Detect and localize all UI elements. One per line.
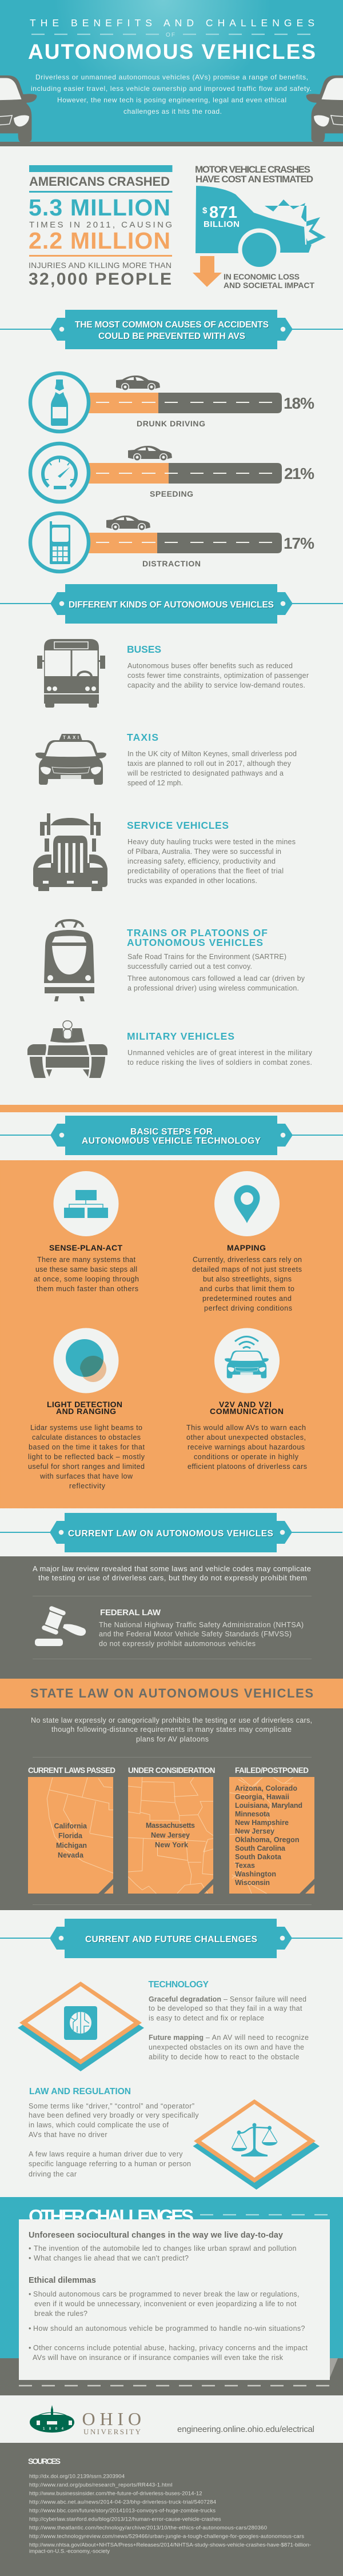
main title: AUTONOMOUS VEHICLES bbox=[28, 40, 316, 63]
times in 2011: TIMES IN 2011, CAUSING bbox=[29, 220, 172, 230]
step: v2v: This would allow AVs to warn each bbox=[186, 1424, 306, 1432]
card: challenge list: • bbox=[29, 2254, 31, 2262]
state law heading bbox=[0, 1679, 343, 1708]
item: technology challenge: TECHNOLOGY bbox=[149, 1980, 209, 1990]
column: failed or postponed: Texas bbox=[235, 1862, 255, 1870]
state law text: though following-distance requirements in many states may complicate bbox=[51, 1726, 292, 1734]
federal law: FEDERAL LAW bbox=[100, 1608, 161, 1618]
item: service vehicles bbox=[33, 813, 296, 891]
step: lidar: with surfaces that have low bbox=[39, 1472, 133, 1480]
step: sense-plan-act: SENSE-PLAN-ACT bbox=[49, 1243, 122, 1252]
cost figure bbox=[202, 203, 240, 229]
column: current laws passed: California bbox=[54, 1822, 87, 1830]
step: mapping: detailed maps of not just streets bbox=[192, 1265, 302, 1273]
item: trains or platoons: TRAINS OR PLATOONS OF bbox=[127, 927, 268, 938]
intro paragraph bbox=[31, 73, 312, 115]
cost figure: $ bbox=[202, 206, 208, 215]
banner: basic steps: BASIC STEPS FOR bbox=[130, 1127, 213, 1137]
intro paragraph: Driverless or unmanned autonomous vehicles (AVs) promise a range of benefits, bbox=[35, 73, 308, 81]
item: law and regulation: driving the car bbox=[29, 2170, 77, 2178]
icon: scales diamond bbox=[193, 2099, 320, 2190]
item: service vehicles: Heavy duty hauling trucks were tested in the mines bbox=[127, 838, 296, 846]
card: challenge list: even if it would be unnecessary, inconvenient or even jeopardizing a life to not bbox=[34, 2300, 297, 2308]
column: failed or postponed: South Carolina bbox=[235, 1844, 286, 1852]
item: taxis: TAXIS bbox=[127, 732, 158, 743]
icon: bottle bbox=[30, 373, 89, 432]
column: failed or postponed: FAILED/POSTPONED bbox=[235, 1766, 309, 1775]
item: law and regulation: have been defined very broadly or very specifically bbox=[29, 2111, 199, 2119]
arrow: downward bbox=[193, 256, 222, 287]
icon: train bbox=[44, 920, 94, 1001]
column: current laws passed bbox=[28, 1766, 115, 1894]
step: mapping: perfect driving conditions bbox=[204, 1304, 292, 1312]
item: technology challenge: to be developed so that they fail in a way that bbox=[149, 2004, 302, 2012]
banner: common causes: THE MOST COMMON CAUSES OF ACCIDENTS bbox=[75, 320, 269, 330]
step: lidar: light to be reflected back – mostly bbox=[28, 1453, 145, 1461]
card: challenge list: Unforeseen sociocultural changes in the way we live day-to-day bbox=[29, 2231, 283, 2240]
stat: 32,000 people: 32,000 PEOPLE bbox=[29, 270, 172, 289]
icon: Ohio University seal bbox=[30, 2405, 74, 2433]
item: trains or platoons: successfully carried out a test convoy. bbox=[127, 962, 252, 971]
americans crashed: AMERICANS CRASHED bbox=[29, 174, 170, 189]
panel: federal and state law bbox=[0, 1556, 343, 1910]
step: v2v: efficient platoons of driverless cars bbox=[188, 1463, 307, 1471]
icon: gavel bbox=[35, 1605, 86, 1646]
column: failed or postponed: Minnesota bbox=[235, 1810, 270, 1818]
item: technology challenge: is easy to detect and fix or replace bbox=[149, 2014, 264, 2022]
item: service vehicles: predictability of operations that the fleet of trial bbox=[127, 867, 284, 875]
card: challenge list: • bbox=[29, 2325, 31, 2333]
step: mapping: Currently, driverless cars rely on bbox=[193, 1256, 302, 1264]
column: failed or postponed: Arizona, Colorado bbox=[235, 1784, 297, 1792]
logo wordmark: UNIVERSITY bbox=[83, 2427, 141, 2436]
card: challenge list: Other concerns include potential abuse, hacking, privacy concerns and the impact bbox=[33, 2344, 308, 2352]
cost heading: MOTOR VEHICLE CRASHES bbox=[195, 164, 310, 175]
intro paragraph: including easier travel, less vehicle ownership and improved traffic flow and safety. bbox=[31, 85, 312, 93]
step: v2v: other about unexpected obstacles, bbox=[186, 1433, 306, 1441]
cost heading bbox=[195, 164, 313, 185]
panel: economic cost bbox=[193, 164, 326, 290]
step: lidar: reflectivity bbox=[69, 1482, 106, 1490]
step: sense-plan-act: them much faster than others bbox=[37, 1285, 138, 1293]
law review text: A major law review revealed that some laws and vehicle codes may complicate bbox=[33, 1564, 311, 1573]
item: technology challenge: ability to decide how to react to the obstacle bbox=[149, 2053, 300, 2061]
item: law and regulation: AVs that have no driver bbox=[29, 2131, 107, 2139]
panel: technology steps bbox=[0, 1160, 343, 1508]
intro paragraph: challenges as it hits the road. bbox=[123, 107, 222, 115]
item: technology challenge: Future mapping bbox=[149, 2034, 204, 2042]
item: military vehicles: to reduce risking the lives of soldiers in combat zones. bbox=[127, 1059, 312, 1067]
federal law: The National Highway Traffic Safety Administration (NHTSA) bbox=[99, 1621, 304, 1629]
icon: phone bbox=[30, 513, 89, 572]
kicker title: THE BENEFITS AND CHALLENGES bbox=[30, 17, 314, 29]
banner: current law: CURRENT LAW ON AUTONOMOUS VEHICLES bbox=[68, 1529, 273, 1539]
item: law and regulation: specific language referring to a human or person bbox=[29, 2160, 191, 2168]
item: trains or platoons: Three autonomous cars followed a lead car (driven by bbox=[127, 975, 305, 983]
column: failed or postponed: Wisconsin bbox=[235, 1879, 270, 1887]
icon: connected car bbox=[214, 1328, 280, 1393]
state law text: plans for AV platoons bbox=[136, 1735, 209, 1743]
column: under consideration: New York bbox=[155, 1841, 188, 1849]
column: failed or postponed: Oklahoma, Oregon bbox=[235, 1836, 300, 1844]
economic loss caption: IN ECONOMIC LOSS bbox=[224, 272, 300, 281]
federal law bbox=[99, 1608, 304, 1648]
panel: sources bbox=[0, 2443, 343, 2576]
item: service vehicles: trucks was expanded in other locations. bbox=[127, 877, 257, 885]
step: mapping: and curbs that limit them to bbox=[200, 1285, 294, 1293]
panel: sources: impact-on-U.S.-economy,-society bbox=[29, 2548, 110, 2555]
step: mapping: MAPPING bbox=[227, 1243, 266, 1252]
stat: 2.2 million: 2.2 MILLION bbox=[29, 227, 170, 254]
panel: sources: http://cyberlaw.stanford.edu/blog/2013/12/human-error-cause-vehicle-crashes bbox=[29, 2516, 221, 2523]
item: taxis bbox=[35, 732, 297, 787]
card: challenge list: Should autonomous cars be programmed to never break the law or regulations, bbox=[33, 2290, 300, 2298]
road strip bbox=[0, 142, 343, 146]
panel: sources: http://www.rand.org/pubs/research_reports/RR443-1.html bbox=[29, 2482, 173, 2489]
step: v2v: receive warnings about hazardous bbox=[188, 1443, 305, 1451]
card: challenge list: • bbox=[29, 2290, 31, 2298]
icon: Ohio University seal: 1804 bbox=[43, 2427, 64, 2431]
panel: sources: http://www.bbc.com/future/story/20141013-convoys-of-huge-zombie-trucks bbox=[29, 2508, 216, 2514]
item: trains or platoons bbox=[44, 920, 305, 1001]
step: lidar bbox=[28, 1328, 145, 1490]
item: trains or platoons: a professional driver) using wireless communication. bbox=[127, 984, 299, 992]
item: law and regulation: LAW AND REGULATION bbox=[29, 2087, 131, 2096]
banner: current law bbox=[0, 1513, 342, 1552]
icon: truck bbox=[33, 813, 107, 891]
stat: 5.3 million: 5.3 MILLION bbox=[29, 194, 170, 221]
column: failed or postponed: New Jersey bbox=[235, 1827, 274, 1835]
state law heading: STATE LAW ON AUTONOMOUS VEHICLES bbox=[30, 1686, 313, 1700]
state law text: No state law expressly or categorically prohibits the testing or use of driverless cars, bbox=[31, 1716, 312, 1724]
column: under consideration bbox=[128, 1766, 215, 1894]
item: taxis: speed of 12 mph. bbox=[127, 779, 183, 787]
step: sense-plan-act: use these same basic steps all bbox=[35, 1265, 137, 1273]
item: buses: capacity and the ability to service low-demand routes. bbox=[127, 681, 305, 689]
item: buses: Autonomous buses offer benefits such as reduced bbox=[127, 662, 293, 670]
icon: hierarchy bbox=[54, 1171, 119, 1236]
item: buses: costs fewer time constraints, optimization of passenger bbox=[127, 672, 309, 680]
item: buses: BUSES bbox=[127, 644, 161, 655]
card: challenge list: break the rules? bbox=[34, 2310, 87, 2318]
item: law and regulation: A few laws require a human driver due to very bbox=[29, 2150, 183, 2158]
panel: sources: http://www.businessinsider.com/the-future-of-driverless-buses-2014-12 bbox=[29, 2491, 202, 2497]
banner: current and future challenges bbox=[0, 1919, 342, 1958]
column: under consideration: New Jersey bbox=[151, 1831, 190, 1839]
item: taxis: In the UK city of Milton Keynes, small driverless pod bbox=[127, 750, 297, 758]
card: challenge list: What changes lie ahead that we can't predict? bbox=[34, 2254, 189, 2262]
step: sense-plan-act: at once, some looping through bbox=[34, 1275, 139, 1283]
card: challenge list bbox=[19, 2219, 330, 2380]
step: sense-plan-act bbox=[34, 1171, 139, 1293]
step: lidar: LIGHT DETECTION bbox=[47, 1400, 122, 1409]
item: law and regulation: in laws, which could complicate the use of bbox=[29, 2121, 169, 2129]
chart: speeding bar: 21% bbox=[284, 465, 314, 482]
item: trains or platoons: Safe Road Trains for the Environment (SARTRE) bbox=[127, 953, 286, 961]
banner: different kinds bbox=[0, 584, 343, 624]
footer: logo and url bbox=[30, 2405, 314, 2436]
item: service vehicles: increasing safety, efficiency, productivity and bbox=[127, 857, 276, 865]
dashed rule with OF: OF bbox=[166, 32, 175, 38]
step: lidar: based on the time it takes for that bbox=[29, 1443, 145, 1451]
item: technology challenge: unexpected obstacles on its own and have the bbox=[149, 2043, 304, 2051]
column: failed or postponed: Washington bbox=[235, 1870, 276, 1878]
icon: military robot bbox=[27, 1020, 107, 1078]
icon: map pin bbox=[214, 1171, 280, 1236]
card: challenge list: • bbox=[29, 2244, 31, 2252]
icon: taxi: TAXI bbox=[63, 735, 79, 740]
chart: distraction bar: 17% bbox=[284, 534, 314, 552]
item: technology challenge: – Sensor failure will need bbox=[224, 1995, 306, 2003]
step: lidar: Lidar systems use light beams to bbox=[30, 1424, 142, 1432]
chart: drunk driving bar bbox=[30, 373, 314, 432]
banner: current and future challenges: CURRENT AND FUTURE CHALLENGES bbox=[85, 1935, 257, 1944]
item: law and regulation bbox=[29, 2087, 320, 2190]
column: failed or postponed: Louisiana, Maryland bbox=[235, 1802, 302, 1810]
card: challenge list: Ethical dilemmas bbox=[29, 2276, 96, 2285]
panel: sources: http://www.theatlantic.com/technology/archive/2013/10/the-ethics-of-autonomous-cars/280360 bbox=[29, 2525, 267, 2531]
chart: drunk driving bar: DRUNK DRIVING bbox=[137, 419, 205, 428]
icon: overlapping circles bbox=[54, 1328, 119, 1393]
card: challenge list: AVs will have on insurance or if insurance companies will even take the risk bbox=[33, 2354, 284, 2362]
icon: taxi bbox=[35, 734, 106, 785]
icon: right car bbox=[306, 75, 343, 142]
item: taxis: will be restricted to designated pathways and a bbox=[127, 769, 284, 777]
panel: sources: http://www.abc.net.au/news/2014-04-23/bhp-driverless-truck-trial/5407284 bbox=[29, 2499, 216, 2506]
cost heading: HAVE COST AN ESTIMATED bbox=[196, 174, 313, 185]
item: taxis: taxis are planned to roll out in 2017, although they bbox=[127, 760, 292, 768]
column: current laws passed: Nevada bbox=[58, 1851, 84, 1859]
icon: left car bbox=[0, 75, 37, 142]
panel: sources: SOURCES bbox=[28, 2457, 61, 2466]
item: buses bbox=[37, 639, 309, 708]
icon: crashed car bbox=[196, 186, 326, 267]
intro paragraph: However, the new tech is posing engineering, legal and even ethical bbox=[57, 96, 286, 104]
column: failed or postponed bbox=[229, 1766, 314, 1894]
item: military vehicles bbox=[27, 1020, 313, 1078]
item: trains or platoons: AUTONOMOUS VEHICLES bbox=[127, 937, 263, 948]
item: technology challenge: – An AV will need to recognize bbox=[206, 2034, 309, 2042]
step: lidar: calculate distances to obstacles bbox=[32, 1433, 141, 1441]
step: v2v: conditions or operate in highly bbox=[194, 1453, 299, 1461]
step: sense-plan-act: There are many systems that bbox=[37, 1256, 136, 1264]
chart: distraction bar: DISTRACTION bbox=[142, 559, 201, 568]
icon: speedometer bbox=[30, 444, 89, 502]
panel: other challenges bbox=[0, 2197, 343, 2395]
card: challenge list: The invention of the automobile led to changes like urban sprawl and pollution bbox=[34, 2244, 297, 2252]
banner: basic steps bbox=[0, 1116, 343, 1155]
banner: basic steps: AUTONOMOUS VEHICLE TECHNOLOGY bbox=[82, 1136, 261, 1146]
column: current laws passed: CURRENT LAWS PASSED bbox=[28, 1766, 115, 1775]
panel: crash statistics bbox=[29, 165, 173, 289]
item: service vehicles: SERVICE VEHICLES bbox=[127, 820, 229, 831]
column: failed or postponed: Georgia, Hawaii bbox=[235, 1793, 289, 1801]
step: lidar: AND RANGING bbox=[56, 1407, 116, 1416]
item: technology challenge bbox=[18, 1980, 309, 2071]
chart: distraction bar bbox=[30, 513, 314, 572]
item: military vehicles: Unmanned vehicles are of great interest in the military bbox=[127, 1049, 313, 1057]
item: service vehicles: of Pilbara, Australia. They were so successful in bbox=[127, 848, 281, 856]
law review text: the testing or use of driverless cars, but they do not expressly prohibit them bbox=[38, 1573, 307, 1582]
economic loss caption: AND SOCIETAL IMPACT bbox=[224, 281, 314, 290]
step: v2v: V2V AND V2I bbox=[219, 1400, 272, 1409]
banner: common causes: COULD BE PREVENTED WITH AVS bbox=[98, 332, 245, 341]
step: mapping: predetermined routes and bbox=[202, 1295, 292, 1303]
economic loss caption bbox=[224, 272, 314, 290]
orange stripe bbox=[0, 1105, 343, 1112]
header panel bbox=[0, 0, 343, 146]
step: lidar: useful for short ranges and limited bbox=[28, 1463, 145, 1471]
banner: common causes bbox=[0, 310, 343, 349]
chart: speeding bar bbox=[30, 444, 314, 502]
panel: sources: http://www.technologyreview.com/news/529466/urban-jungle-a-tough-challenge-for-googles-autonomous-cars bbox=[29, 2533, 304, 2540]
chart: speeding bar: SPEEDING bbox=[150, 489, 193, 498]
panel: sources: http://dx.doi.org/10.2139/ssrn.2303904 bbox=[29, 2474, 125, 2479]
teal bar bbox=[29, 165, 173, 172]
step: v2v: COMMUNICATION bbox=[210, 1407, 284, 1416]
state law text bbox=[31, 1716, 312, 1743]
step: mapping bbox=[192, 1171, 302, 1312]
step: mapping: but also streetlights, signs bbox=[203, 1275, 292, 1283]
card: challenge list: How should an autonomous vehicle be programmed to handle no-win situations? bbox=[33, 2325, 305, 2333]
icon: bus bbox=[37, 639, 105, 708]
logo wordmark: OHIO bbox=[82, 2409, 141, 2429]
federal law: and the Federal Motor Vehicle Safety Standards (FMVSS) bbox=[99, 1630, 292, 1638]
federal law: do not expressly prohibit automonous vehicles bbox=[99, 1640, 256, 1648]
site url: engineering.online.ohio.edu/electrical bbox=[177, 2425, 314, 2434]
banner: different kinds: DIFFERENT KINDS OF AUTONOMOUS VEHICLES bbox=[69, 600, 274, 610]
panel: sources: http://www.nhtsa.gov/About+NHTSA/Press+Releases/2014/NHTSA-study-shows-vehicle-crashes-have-$871-billion- bbox=[29, 2542, 311, 2548]
cost figure: BILLION bbox=[204, 219, 240, 229]
cost figure: 871 bbox=[209, 203, 237, 222]
chart: drunk driving bar: 18% bbox=[284, 394, 314, 412]
item: law and regulation: Some terms like “driver,” “control” and “operator” bbox=[29, 2102, 194, 2110]
column: current laws passed: Michigan bbox=[56, 1842, 87, 1850]
column: failed or postponed: New Hampshire bbox=[235, 1819, 289, 1827]
injuries and killing: INJURIES AND KILLING MORE THAN bbox=[29, 261, 172, 270]
icon: technology diamond bbox=[18, 1982, 144, 2071]
item: military vehicles: MILITARY VEHICLES bbox=[127, 1031, 234, 1042]
card: challenge list: • bbox=[29, 2344, 31, 2352]
other challenges heading: OTHER CHALLENGES bbox=[29, 2206, 194, 2227]
column: failed or postponed: South Dakota bbox=[235, 1853, 282, 1861]
column: under consideration: UNDER CONSIDERATION bbox=[128, 1766, 215, 1775]
item: technology challenge: Graceful degradation bbox=[149, 1995, 221, 2003]
column: under consideration: Massachusetts bbox=[146, 1822, 195, 1830]
step: v2v bbox=[186, 1328, 307, 1471]
column: current laws passed: Florida bbox=[58, 1832, 83, 1840]
law review text bbox=[33, 1564, 311, 1582]
